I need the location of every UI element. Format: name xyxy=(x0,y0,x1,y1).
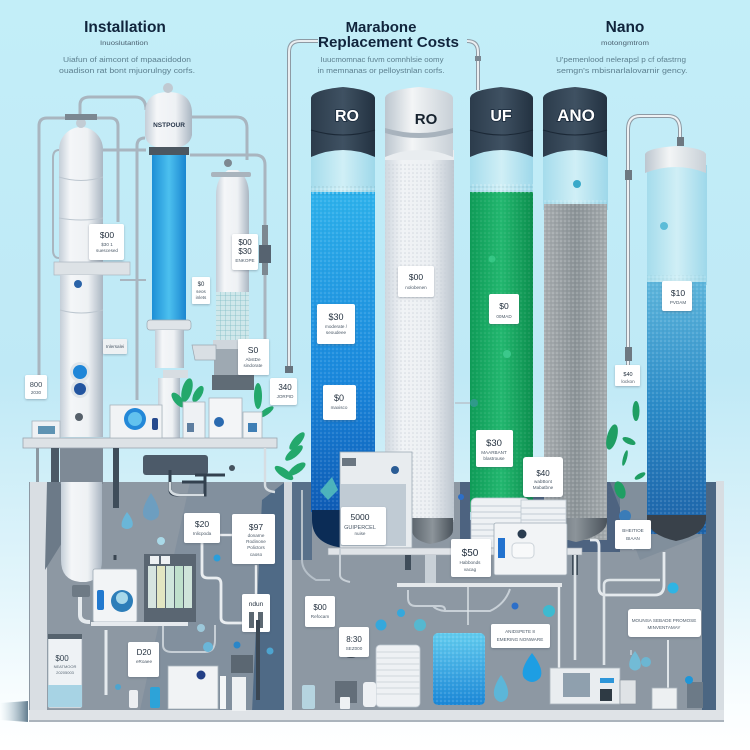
label: $20: Inlicpoda xyxy=(193,531,212,536)
label: $00 upper left: suescesed xyxy=(96,248,118,253)
label: $0 UF xyxy=(489,294,519,324)
column: UF green xyxy=(470,87,533,520)
label: nano riser tag xyxy=(615,365,640,386)
label: warranty note: MINVENTAMAY xyxy=(647,625,681,630)
label: RO: RO xyxy=(415,111,438,128)
label: $30 RO: $30 xyxy=(328,312,344,322)
label: D20: eRoaee xyxy=(136,659,152,664)
label: $40 ring: Mabatbne xyxy=(533,485,554,490)
equipment: bottom row right xyxy=(302,633,703,709)
label: $97: caoso xyxy=(250,552,263,557)
label: $30 green: blastrouse xyxy=(483,456,505,461)
label: 8:30: 8:30 xyxy=(346,635,362,644)
label: $90 $30: ENKOPE xyxy=(235,258,255,263)
label: $50: maxisco xyxy=(331,405,348,410)
equipment: bottom left devices xyxy=(48,634,253,711)
pipes: upper left network xyxy=(39,97,265,400)
label: $0 small: $0 xyxy=(198,282,205,288)
heading: Installation: Inuoslutantion xyxy=(100,40,148,47)
pipes: lower left bay xyxy=(80,535,256,695)
label: emission note xyxy=(491,624,550,648)
label: $00 refocam xyxy=(305,596,335,627)
heading: Installation xyxy=(59,19,195,75)
label: ANO: ANO xyxy=(557,106,595,125)
label: $97: Polictors xyxy=(247,545,266,550)
label: 5000: 5000 xyxy=(351,512,370,522)
plant: centre leaves xyxy=(169,377,275,420)
label: S0 xyxy=(238,339,269,375)
label: ndun xyxy=(242,594,270,632)
vessel: centre blue column xyxy=(145,83,192,438)
label: $97: Rodinone xyxy=(246,539,266,544)
heading: Installation: Installation xyxy=(84,19,166,36)
icons: water bubbles right bay xyxy=(320,399,693,684)
label: $30 RO: seoudeee xyxy=(326,330,347,335)
label: ndun: ndun xyxy=(249,601,264,608)
label: side tag xyxy=(103,339,127,354)
icons: water drops left bay xyxy=(115,493,274,690)
label: $0 UF: 00MAD xyxy=(496,314,512,319)
label: right note: BHEITIOE xyxy=(622,528,644,533)
heading: Marabone Replacement Costs: Iuucmomnac fuvm comnhlsie oomy xyxy=(320,55,444,64)
panel: control box left bay xyxy=(91,569,188,626)
label: $00 left edge xyxy=(25,375,47,399)
label: side tag: Inlersalei xyxy=(106,344,124,349)
label: 8:30: SEZ000 xyxy=(346,646,363,651)
equipment: bottom left devices: NEATMOOR xyxy=(54,664,77,669)
label: $00 refocam: $00 xyxy=(313,603,327,612)
equipment: shelf devices xyxy=(32,398,262,438)
device: control unit xyxy=(494,523,567,575)
label: UF: UF xyxy=(490,108,512,125)
label: $40 xyxy=(270,378,297,405)
stacks: white rings xyxy=(471,498,566,548)
heading: Marabone Replacement Costs: Replacement Costs xyxy=(318,34,459,51)
shelf: left equipment xyxy=(23,438,277,508)
label: $40 ring xyxy=(523,457,563,497)
label: $40: 340 xyxy=(278,383,292,392)
label: $0 small xyxy=(192,277,210,304)
label: $97: $97 xyxy=(249,522,263,532)
label: S0: sindorate xyxy=(244,363,263,368)
cost labels xyxy=(25,224,701,677)
label: D20 xyxy=(128,642,159,677)
label: 5000 xyxy=(341,507,386,545)
label: $00 left edge: 800 xyxy=(30,380,42,389)
pipes: right bay xyxy=(302,490,668,688)
label: D20: D20 xyxy=(137,648,152,657)
label: $50: vacag xyxy=(464,567,477,572)
label: warranty note xyxy=(628,609,701,637)
vessel: left tall tank xyxy=(54,118,130,597)
device: cabinet centre xyxy=(340,452,412,548)
panel: fuse board xyxy=(144,554,196,622)
cistern: lower cutaway room xyxy=(0,481,724,722)
cable: black conduit xyxy=(256,620,260,700)
label: column tag: NSTPOUR xyxy=(153,122,185,129)
column: RO white xyxy=(385,87,454,544)
label: $0 small: inlets xyxy=(196,295,207,300)
label: $40 ring: $40 xyxy=(536,469,550,478)
equipment: bottom left devices: 20205003 xyxy=(56,670,75,675)
vessel: right white column with mesh xyxy=(192,159,271,390)
label: $00 white column: nolobenen xyxy=(405,285,427,290)
shelf: right xyxy=(328,548,582,587)
label: $50: $50 xyxy=(462,548,479,559)
label: nano riser tag: lockon xyxy=(621,379,635,384)
label: $40 ring: wabBont xyxy=(534,479,553,484)
label: $20 xyxy=(184,513,220,543)
column: ANO gray xyxy=(543,87,608,542)
label: $0 small: seos xyxy=(196,289,207,294)
label: $90 $30: $00 xyxy=(238,238,252,247)
label: 5000: GUIPERCEL xyxy=(344,525,376,531)
pipe: long left riser to top of RO xyxy=(285,41,481,373)
label: $00 refocam: Refocam xyxy=(311,614,329,619)
label: $40: JORPID xyxy=(277,394,294,399)
label: 8:30 xyxy=(339,627,369,657)
heading: Installation: Uiafun of aimcont of mpaacidodon xyxy=(63,55,191,64)
label: nano riser tag: $40 xyxy=(623,372,633,378)
label: right note xyxy=(615,520,651,549)
label: $20: $20 xyxy=(195,519,209,529)
column: RO blue xyxy=(311,87,375,548)
label: $30 green xyxy=(476,430,513,467)
label: right note: BIAAN xyxy=(626,536,640,541)
plant: corner leaves xyxy=(273,430,307,483)
label: $90 $30: $30 xyxy=(238,247,252,256)
heading: Marabone Replacement Costs xyxy=(318,19,459,75)
label: $00 left edge: 2030 xyxy=(31,390,42,395)
label: emission note: ANIDSPETE 8 xyxy=(505,629,535,634)
heading: Marabone Replacement Costs: Marabone xyxy=(346,19,416,36)
label: $50: $0 xyxy=(334,393,344,403)
label: 5000: nuise xyxy=(355,531,366,536)
label: RO: RO xyxy=(335,108,359,125)
label: S0: S0 xyxy=(248,345,258,355)
label: $50 xyxy=(451,539,491,577)
label: $30 RO xyxy=(317,304,355,344)
label: $00 upper left: $00 xyxy=(100,230,114,240)
label: emission note: EMERING NONWARE xyxy=(497,637,543,642)
label: $50: Habbonds xyxy=(460,560,481,565)
label: S0: AbstDe xyxy=(245,357,261,362)
label: $30 green: MAARBANT xyxy=(481,450,507,455)
label: $10 nano xyxy=(662,281,692,311)
label: warranty note: MOUNSA SEBADE PROMOSE xyxy=(632,618,696,623)
label: $50 xyxy=(323,385,356,420)
heading: Nano: Nano xyxy=(606,19,644,36)
heading: Nano: semgn's mbisnarlalovarnir gency. xyxy=(556,66,688,75)
label: $90 $30 xyxy=(232,234,258,270)
label: $97: donarne xyxy=(248,533,265,538)
column: Nano xyxy=(645,146,707,541)
label: $30 green: $30 xyxy=(486,438,502,449)
label: $00 white column: $00 xyxy=(409,272,423,282)
label: $00 upper left xyxy=(89,224,124,260)
heading: Installation: ouadison rat bont mjuorulngy corfs. xyxy=(59,66,195,75)
label: $30 RO: moderate / xyxy=(325,324,348,329)
label: $10 nano: $10 xyxy=(671,288,685,298)
label: $00 upper left: $30 1 xyxy=(101,242,113,247)
label: $0 UF: $0 xyxy=(499,301,509,311)
label: $10 nano: PVDAM xyxy=(670,300,686,305)
label: $00 white column xyxy=(398,266,434,297)
label: $97 xyxy=(232,514,275,564)
heading: Marabone Replacement Costs: in memnanas or pelloystnlan corfs. xyxy=(318,66,444,75)
heading: Nano: U'pemenlood nelerapsl p cf ofastrng xyxy=(556,55,686,64)
pipe: nano arch xyxy=(625,116,684,365)
heading: Nano: motongmtrom xyxy=(601,40,649,47)
plant: right sprig xyxy=(604,401,646,500)
heading: Nano xyxy=(556,19,688,75)
equipment: bottom left devices: $00 xyxy=(55,654,69,663)
